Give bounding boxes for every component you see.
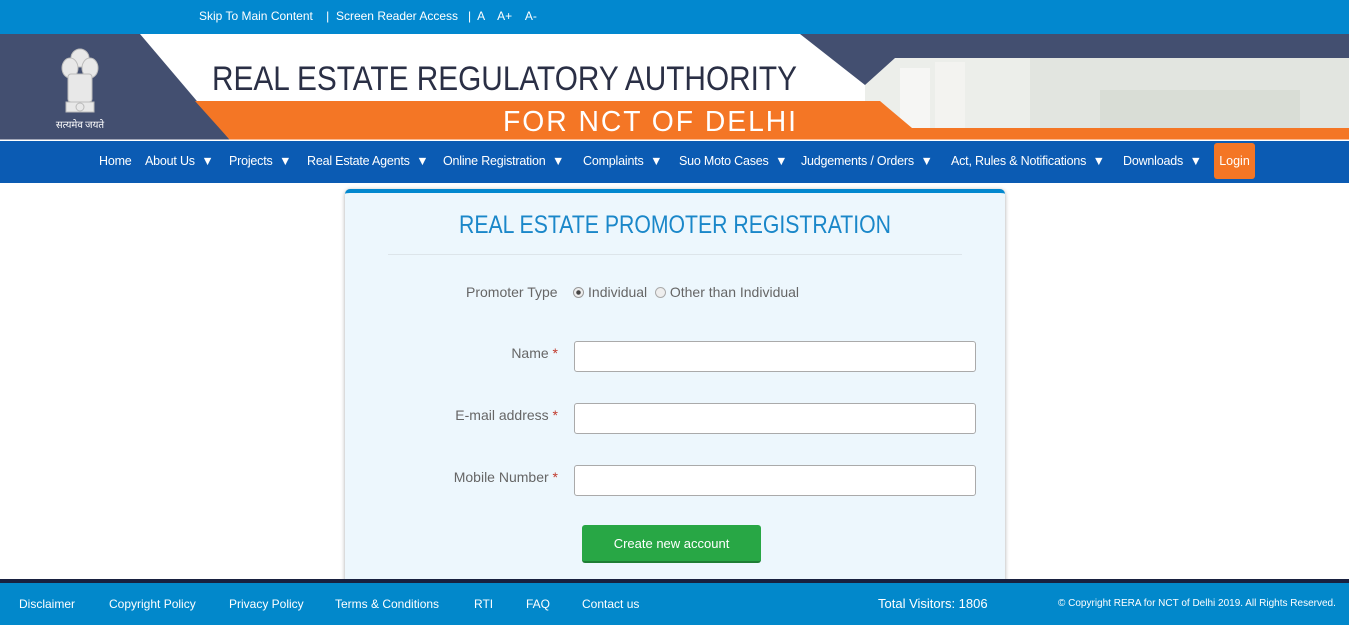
login button <box>1214 143 1255 179</box>
copyright: © Copyright RERA for NCT of Delhi 2019. All Rights Reserved. <box>1058 598 1336 609</box>
login button: Login <box>1219 154 1250 168</box>
navigation bar: About Us ▼ <box>145 154 214 168</box>
navigation bar: Suo Moto Cases ▼ <box>679 154 787 168</box>
navigation bar: Home <box>99 154 132 168</box>
footer: Terms & Conditions <box>335 597 439 611</box>
footer: FAQ <box>526 597 550 611</box>
footer: Privacy Policy <box>229 597 304 611</box>
navigation bar <box>0 141 1349 183</box>
visitor counter: Total Visitors: 1806 <box>878 596 988 611</box>
field: name: Name * <box>511 345 558 361</box>
navigation bar: Judgements / Orders ▼ <box>801 154 933 168</box>
footer: Contact us <box>582 597 639 611</box>
promoter type: Promoter Type Individual Other than Individual <box>466 284 799 300</box>
navigation bar: Projects ▼ <box>229 154 291 168</box>
panel: registration form <box>345 189 1005 584</box>
banner <box>0 34 1349 140</box>
field: mobile: Mobile Number * <box>454 469 558 485</box>
navigation bar: Act, Rules & Notifications ▼ <box>951 154 1105 168</box>
icon: national emblem <box>56 48 104 131</box>
form heading: REAL ESTATE PROMOTER REGISTRATION <box>459 211 891 239</box>
field: email: E-mail address * <box>455 407 558 423</box>
navigation bar: Online Registration ▼ <box>443 154 564 168</box>
footer: Copyright Policy <box>109 597 196 611</box>
icon: national emblem: सत्यमेव जयते <box>56 116 104 131</box>
navigation bar: Complaints ▼ <box>583 154 662 168</box>
navigation bar: Downloads ▼ <box>1123 154 1202 168</box>
submit button: Create new account <box>614 536 729 551</box>
submit button <box>582 525 761 563</box>
title <box>212 60 798 136</box>
top accessibility bar <box>0 0 1349 34</box>
accessibility links: Skip To Main Content | Screen Reader Access | A A+ A- <box>199 9 537 23</box>
footer <box>0 579 1349 625</box>
footer: Disclaimer <box>19 597 75 611</box>
navigation bar: Real Estate Agents ▼ <box>307 154 428 168</box>
footer: RTI <box>474 597 493 611</box>
